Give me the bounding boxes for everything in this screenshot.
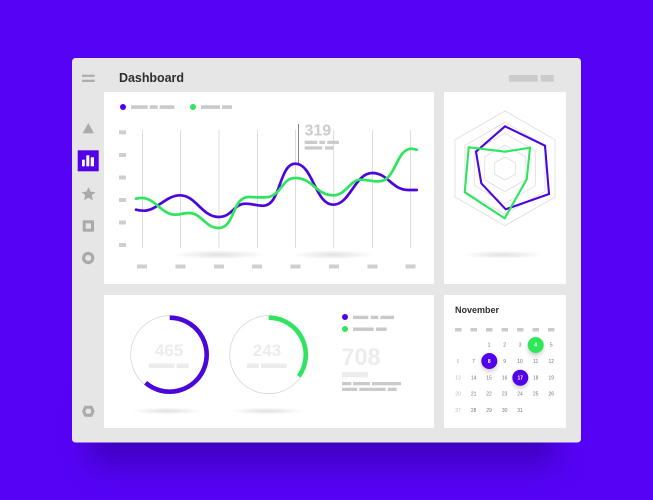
donut 465: 465 xyxy=(155,341,183,360)
calendar dates: 13 xyxy=(455,375,461,381)
calendar dates: 26 xyxy=(549,392,554,398)
calendar dates: 24 xyxy=(517,392,523,398)
calendar dates: 30 xyxy=(502,408,508,414)
calendar dates: 18 xyxy=(533,375,539,381)
title: Dashboard xyxy=(119,71,184,85)
green series xyxy=(136,149,417,228)
donut shadows xyxy=(131,408,304,414)
calendar dates: 4 xyxy=(534,342,537,348)
calendar dates xyxy=(455,342,554,414)
calendar dates: 7 xyxy=(472,359,475,365)
donut 243: 243 xyxy=(253,341,281,360)
icon: triangle xyxy=(83,123,94,133)
radar purple xyxy=(476,126,549,209)
calendar dates: 23 xyxy=(502,392,508,398)
calendar dates: 10 xyxy=(517,359,523,365)
donut 243 xyxy=(230,316,308,394)
calendar dates: 1 xyxy=(488,342,491,348)
total 708 xyxy=(342,344,401,391)
panel: donut charts xyxy=(104,295,434,428)
callout xyxy=(304,123,339,150)
calendar dates: 6 xyxy=(457,359,460,365)
header placeholder xyxy=(509,75,554,82)
calendar month: November xyxy=(455,305,499,315)
icon: active bar chart xyxy=(78,150,99,171)
icon: circle xyxy=(84,253,93,263)
total 708: 708 xyxy=(342,344,380,371)
calendar dates: 20 xyxy=(455,392,461,398)
sidebar xyxy=(78,75,99,415)
calendar dates: 16 xyxy=(502,375,508,381)
calendar dates: 17 xyxy=(518,375,523,381)
purple series xyxy=(136,164,417,217)
date highlights xyxy=(481,337,544,389)
y axis ticks xyxy=(119,130,126,247)
icon: star xyxy=(82,187,96,200)
calendar dates: 19 xyxy=(549,375,554,381)
window frame xyxy=(72,58,581,442)
x axis ticks xyxy=(137,264,416,268)
icon: settings hexagon xyxy=(84,407,93,415)
grid lines xyxy=(142,130,410,248)
calendar dates: 8 xyxy=(488,359,491,365)
panel: line chart xyxy=(104,92,434,284)
panel: radar chart xyxy=(444,92,566,284)
calendar dates: 29 xyxy=(486,408,492,414)
calendar dates: 21 xyxy=(471,392,477,398)
panel: calendar xyxy=(444,295,566,428)
chart shadows xyxy=(172,250,374,259)
calendar dates: 27 xyxy=(455,408,461,414)
calendar dates: 12 xyxy=(549,359,554,365)
calendar dates: 22 xyxy=(486,392,492,398)
weekday header xyxy=(455,328,554,332)
calendar dates: 15 xyxy=(486,375,492,381)
window shadow xyxy=(90,405,555,465)
calendar dates: 2 xyxy=(503,342,506,348)
chart legend xyxy=(120,104,232,110)
callout: 319 xyxy=(304,123,331,140)
calendar dates: 9 xyxy=(503,359,506,365)
callout marker line xyxy=(298,124,300,164)
donut 465 xyxy=(131,316,209,394)
calendar dates: 28 xyxy=(471,408,477,414)
radar grid xyxy=(455,111,555,226)
calendar dates: 31 xyxy=(517,408,523,414)
donut legend xyxy=(342,314,394,332)
icon: square xyxy=(84,222,92,230)
radar shadow xyxy=(462,251,544,259)
calendar dates: 14 xyxy=(471,375,477,381)
calendar dates: 3 xyxy=(519,342,522,348)
calendar dates: 11 xyxy=(533,359,539,365)
radar green xyxy=(465,147,530,218)
calendar dates: 25 xyxy=(533,392,539,398)
icon: menu xyxy=(82,75,95,82)
calendar dates: 5 xyxy=(550,342,553,348)
